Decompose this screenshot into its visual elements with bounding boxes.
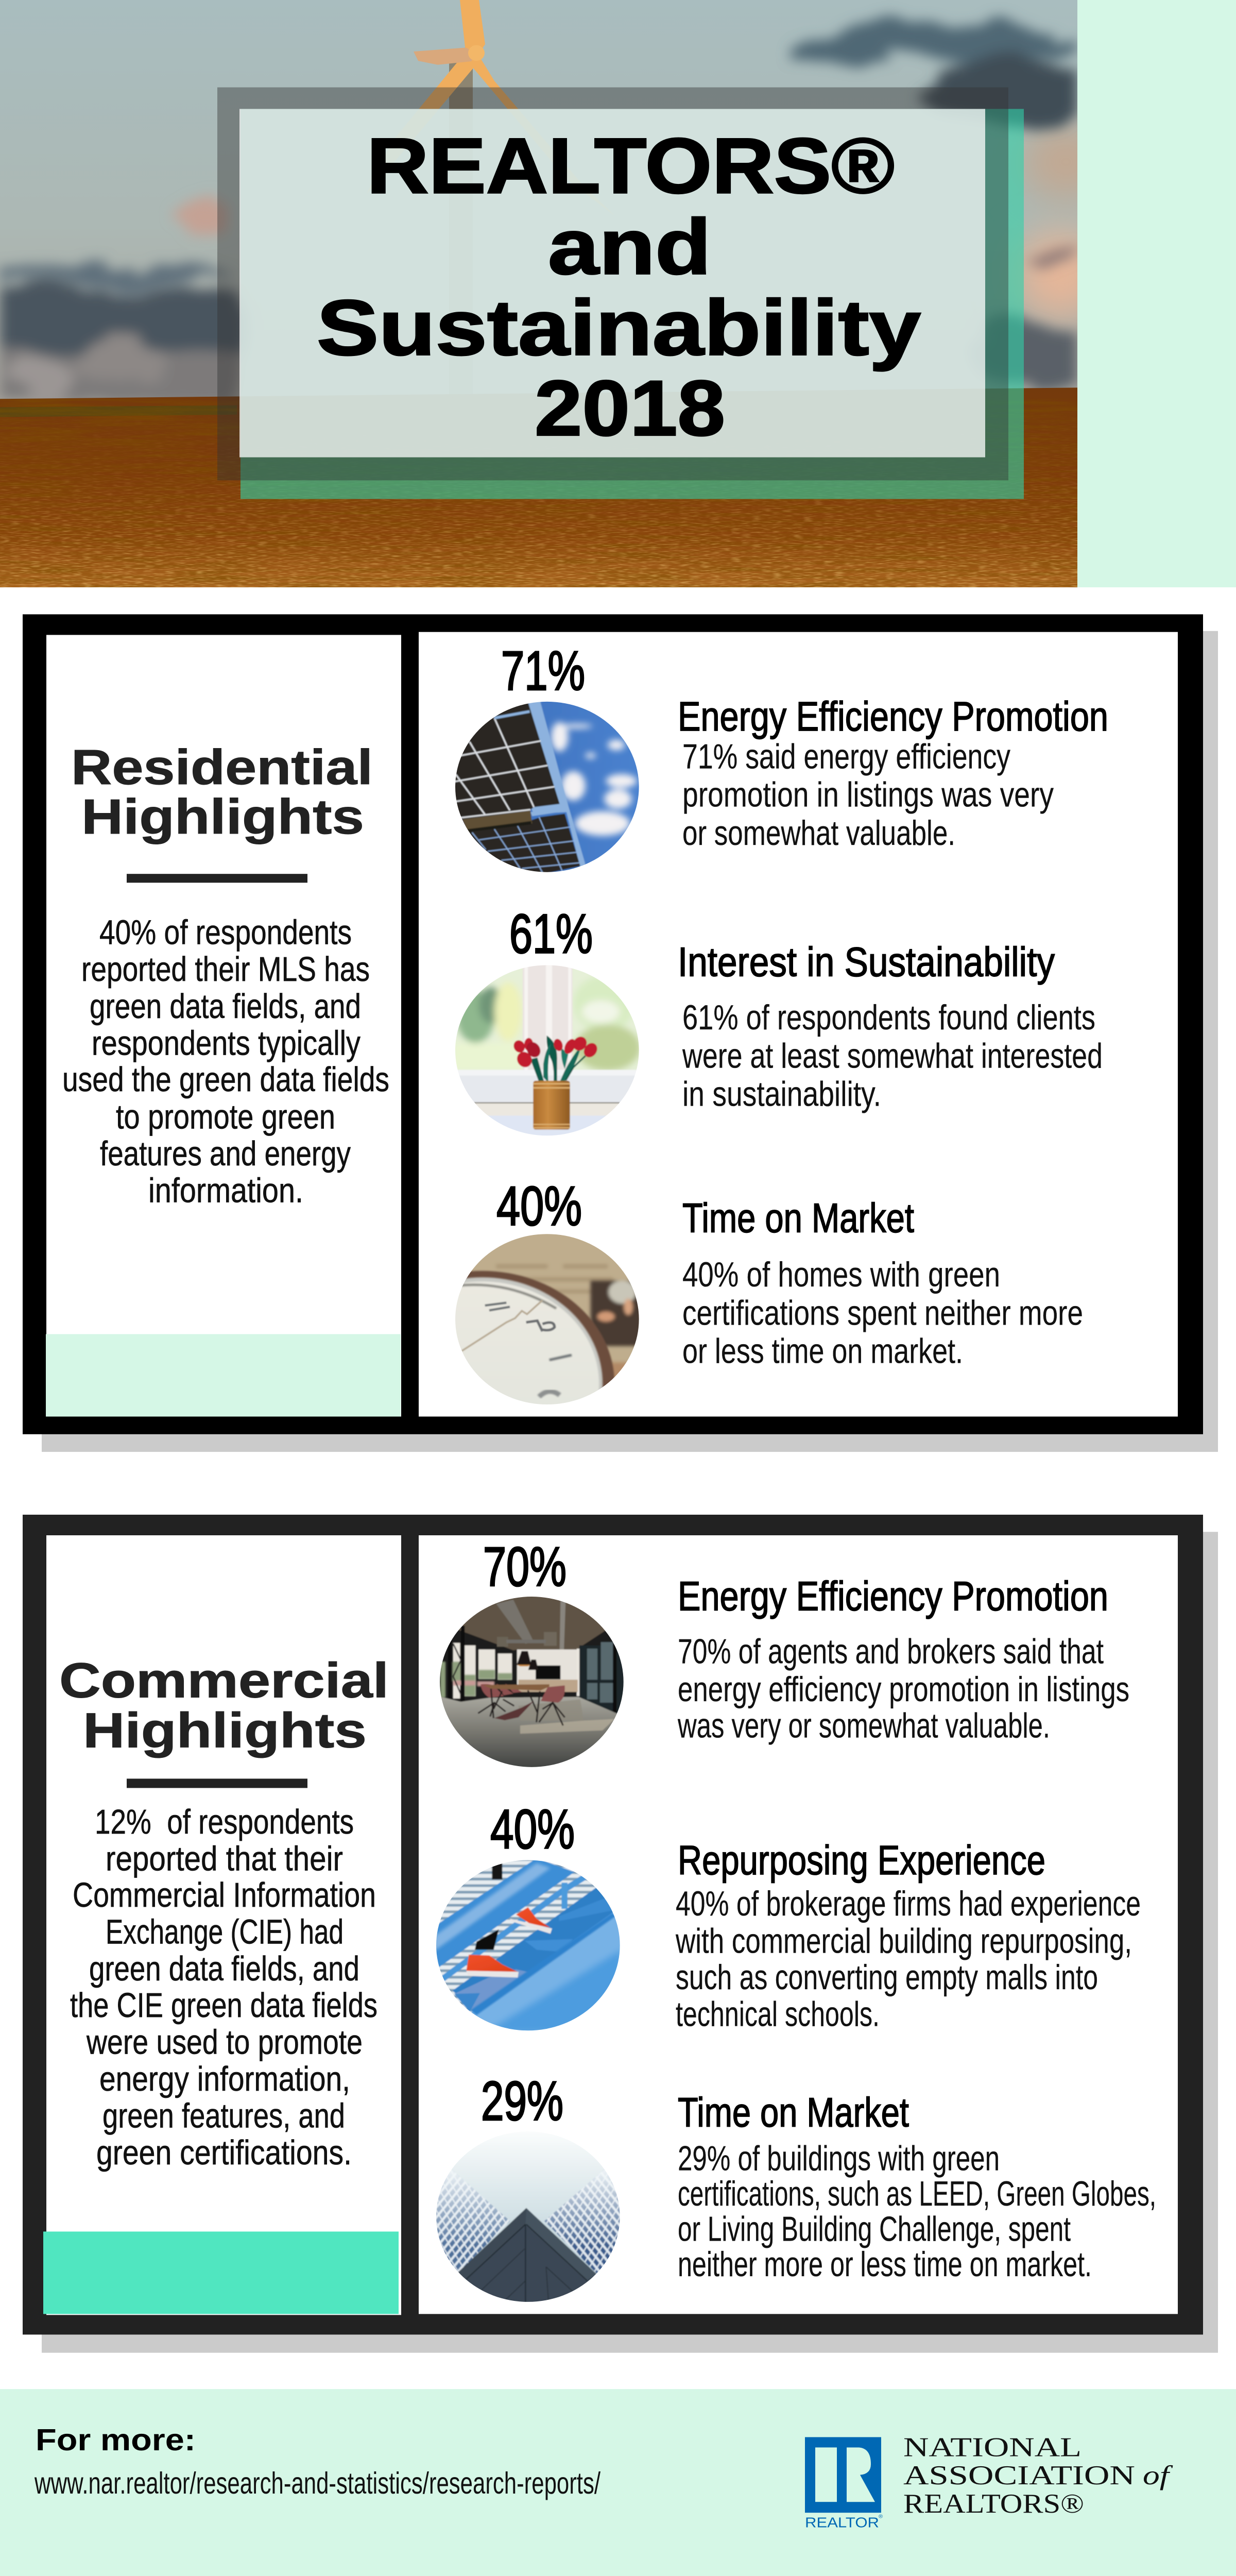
item: time on market: or less time on market. [682,1331,963,1370]
item: energy efficiency promotion: was very or somewhat valuable. [677,1706,1050,1745]
right column [419,1535,1178,2314]
item: time on market: Time on Market [678,2090,909,2136]
item: interest in sustainability: Interest in Sustainability [678,939,1055,985]
photo: tulips on window sill [453,963,641,1137]
mint side strip [1077,0,1236,587]
item: energy efficiency promotion: Energy Efficiency Promotion [678,694,1108,740]
residential summary text [62,913,389,1210]
residential summary text: information. [148,1172,303,1210]
title: 2018 [535,365,725,452]
heading: residential highlights [71,740,373,844]
title: REALTORS® [367,123,895,210]
title overlay: dark box [217,88,1008,480]
commercial summary text: Commercial Information [73,1876,376,1914]
item: interest in sustainability: in sustainability. [682,1074,881,1113]
photo: looking up at skyscrapers [434,2129,622,2303]
item: energy efficiency promotion: promotion in listings was very [682,775,1054,814]
residential summary text: 40% of respondents [99,913,352,952]
stat: 71%: 71% [501,640,585,702]
photo: solar panel [453,699,641,874]
heading: commercial highlights: Highlights [83,1703,367,1758]
item: energy efficiency promotion [678,694,1108,853]
residential summary text: to promote green [116,1098,335,1136]
teal accent block [43,2231,399,2314]
item: time on market: 40% of homes with green [682,1255,1000,1294]
logo: association name: ASSOCIATION [903,2460,1135,2490]
residential summary text: green data fields, and [90,988,361,1026]
left column [46,1535,401,2315]
stat: 29%: 29% [481,2071,563,2132]
title: and [548,204,711,291]
panel frame [23,1515,1203,2334]
item: interest in sustainability [678,939,1103,1113]
turbine tower [449,63,473,109]
heading: commercial highlights [59,1653,389,1758]
logo: association name: REALTORS® [903,2488,1084,2519]
heading underline bar [127,1778,307,1788]
commercial summary text: the CIE green data fields [70,1987,377,2025]
stat: 40%: 40% [490,1799,575,1860]
item: time on market: Time on Market [682,1195,914,1241]
item: energy efficiency promotion: 71% said energy efficiency [682,737,1010,776]
logo: REALTOR block R: ® [879,2514,883,2520]
logo: association name [903,2432,1173,2519]
item: interest in sustainability: 61% of respondents found clients [682,998,1095,1037]
heading: commercial highlights: Commercial [59,1653,389,1708]
turbine blades [419,0,518,109]
commercial summary text: green data fields, and [89,1950,359,1988]
item: time on market: or Living Building Challenge, spent [678,2209,1071,2248]
commercial summary text: reported that their [106,1840,343,1878]
item: repurposing experience [675,1838,1141,2033]
residential summary text: features and energy [100,1134,351,1173]
commercial summary text: green certifications. [96,2133,352,2172]
hero photo: wind turbine over field [0,0,1112,587]
source url: www.nar.realtor/research-and-statistics/research-reports/ [34,2466,600,2500]
footer background [0,2389,1236,2576]
residential summary text: respondents typically [92,1024,361,1062]
turbine nacelle [414,47,476,65]
title: Sustainability [317,284,921,372]
commercial summary text: energy information, [99,2060,350,2098]
photo: office meeting room [438,1595,626,1769]
watch numeral [526,1320,555,1331]
stat: 61%: 61% [509,903,593,965]
heading: residential highlights: Highlights [81,789,364,844]
title overlay: light panel [239,109,985,457]
logo: REALTOR block R [805,2437,883,2531]
footer [0,2389,1236,2576]
commercial summary text: were used to promote [86,2023,363,2061]
item: time on market: certifications spent neither more [682,1293,1083,1332]
right column [419,632,1178,1417]
item: time on market [682,1195,1083,1370]
panel shadow [42,631,1218,1452]
panel: commercial highlights [23,1515,1218,2353]
heading: residential highlights: Residential [71,740,373,794]
item: energy efficiency promotion [677,1574,1129,1745]
commercial summary text: 12% of respondents [95,1803,354,1841]
mint accent block [46,1334,401,1417]
item: energy efficiency promotion: or somewhat valuable. [682,814,955,853]
logo: association name: NATIONAL [903,2432,1082,2462]
heading underline bar [127,874,307,883]
stat: 40%: 40% [496,1176,582,1238]
field [0,387,1077,587]
item: repurposing experience: Repurposing Experience [678,1838,1045,1884]
logo: REALTOR block R: REALTOR [805,2514,879,2531]
panel shadow [42,1532,1218,2353]
commercial summary text: green features, and [102,2097,345,2135]
item: interest in sustainability: were at least somewhat interested [682,1036,1103,1075]
photo: pocket watch [455,1234,639,1404]
title overlay: teal offset box [241,109,1024,499]
item: time on market: 29% of buildings with green [678,2139,1000,2178]
item: repurposing experience: technical schools. [676,1994,880,2033]
commercial summary text: Exchange (CIE) had [106,1913,344,1951]
commercial summary text [70,1803,377,2172]
logo: association name: of [1143,2460,1173,2490]
panel frame [23,614,1203,1434]
residential summary text: reported their MLS has [81,950,370,988]
item: energy efficiency promotion: Energy Efficiency Promotion [678,1574,1108,1619]
title [317,123,921,452]
stat: 70%: 70% [483,1536,566,1598]
left column [46,635,401,1417]
item: time on market [678,2090,1156,2284]
for more label: For more: [36,2423,196,2457]
residential summary text: used the green data fields [62,1061,389,1099]
panel: residential highlights [23,614,1218,1497]
photo: blue staircase [434,1858,622,2032]
hero banner [0,0,1236,587]
